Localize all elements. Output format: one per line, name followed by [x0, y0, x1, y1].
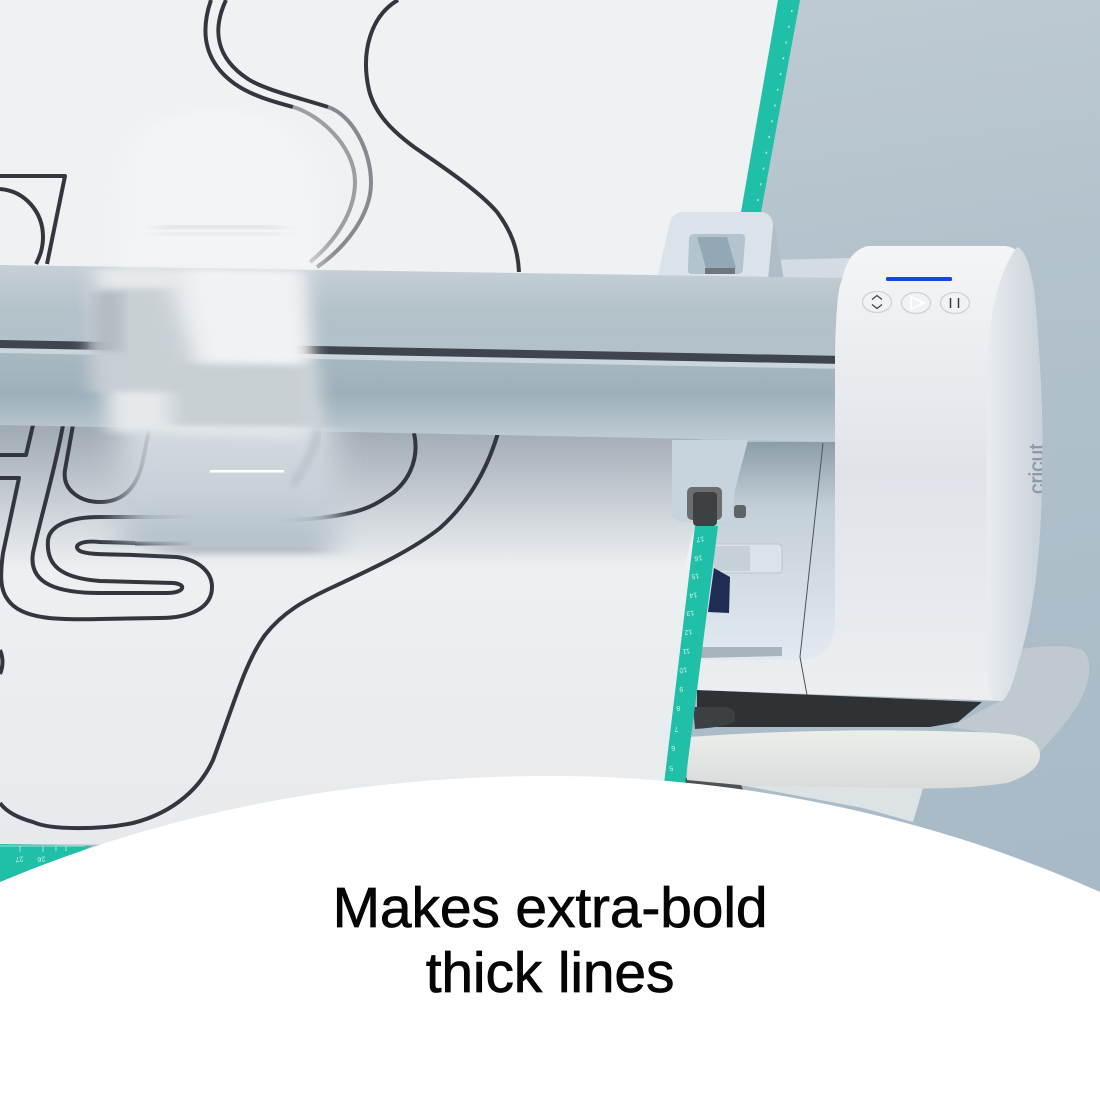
caption heading: [333, 876, 767, 1005]
dark strip under shelf: [685, 778, 745, 795]
teal mat edge lower with ruler numbers: 7: [674, 725, 679, 732]
teal mat corner with ruler numbers: [0, 844, 92, 890]
teal mat edge lower with ruler numbers: 11: [682, 647, 690, 654]
teal mat edge lower with ruler numbers: 13: [686, 608, 695, 617]
teal mat edge lower with ruler numbers: 16: [694, 553, 703, 562]
teal mat edge lower with ruler numbers: 8: [676, 704, 681, 711]
status light: [886, 277, 952, 281]
machine cavity: [700, 442, 840, 675]
teal mat edge upper: [741, 0, 800, 212]
control buttons: [862, 292, 970, 314]
teal mat edge lower with ruler numbers: 5: [669, 764, 674, 771]
shelf top surface: [950, 646, 1089, 752]
top bracket: [658, 212, 784, 280]
back of machine behind bracket: [770, 258, 850, 282]
teal mat corner with ruler numbers: 26: [37, 854, 46, 863]
roller: [687, 487, 746, 526]
printed lines lower: [0, 425, 498, 828]
teal mat edge lower with ruler numbers: 14: [689, 590, 698, 599]
teal mat corner with ruler numbers: 27: [15, 854, 24, 863]
caption heading: Makes extra-bold: [333, 876, 767, 940]
teal mat edge lower with ruler numbers: [664, 526, 718, 784]
rail lower: [0, 346, 845, 442]
blurred carriage: [90, 110, 335, 554]
machine base: [697, 690, 982, 727]
teal mat edge lower with ruler numbers: 10: [679, 665, 688, 674]
shelf rim: [687, 730, 1040, 788]
paper lower: [0, 425, 700, 846]
paper upper: [0, 0, 778, 280]
lower bracket: [672, 440, 748, 522]
rail upper: [0, 265, 845, 358]
foot tab: [693, 707, 735, 729]
teal mat edge lower with ruler numbers: 12: [684, 627, 693, 636]
shelf support post: [740, 785, 923, 822]
teal mat edge lower with ruler numbers: 6: [671, 744, 676, 751]
rail slot: [0, 340, 845, 364]
teal mat edge lower with ruler numbers: 9: [679, 685, 684, 692]
teal mat edge lower with ruler numbers: 17: [696, 534, 705, 543]
caption heading: thick lines: [426, 941, 674, 1005]
shadow under rail on paper: [0, 425, 700, 575]
teal mat edge lower with ruler numbers: 15: [691, 571, 700, 580]
machine side face: [987, 247, 1042, 701]
brand mark: cricut: [1026, 444, 1049, 494]
rail highlight strip: [0, 348, 845, 369]
machine body: [697, 246, 1042, 701]
bottom white curved panel: [0, 776, 1100, 1100]
printed lines upper: [0, 0, 519, 272]
seam line: [800, 443, 823, 695]
